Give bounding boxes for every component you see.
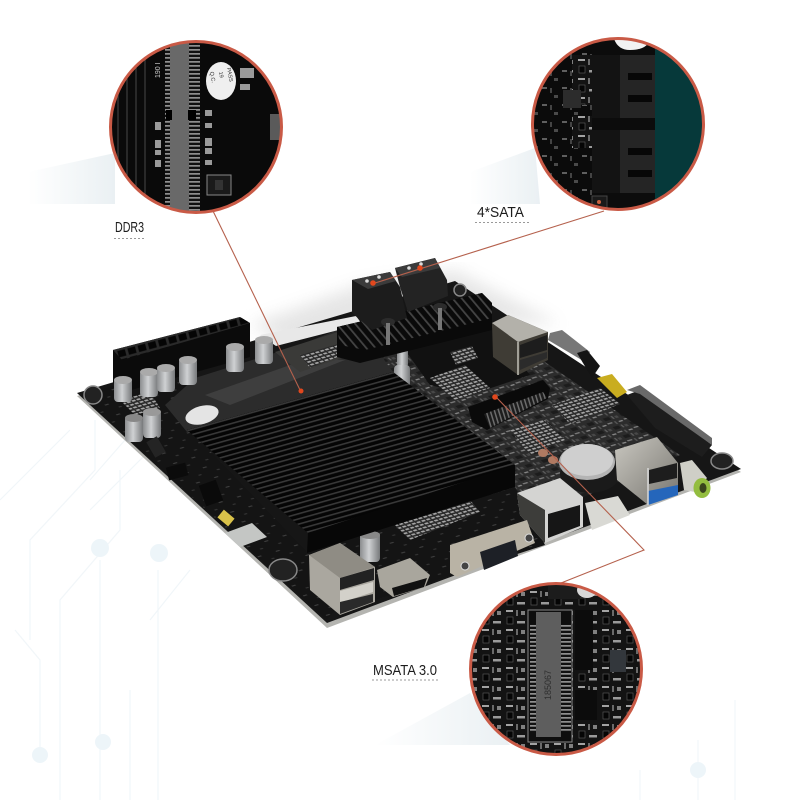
pin headers — [548, 330, 712, 457]
ATX power connector — [113, 317, 250, 392]
board PCB surface — [77, 281, 741, 623]
callout circle: SATA close-up — [530, 35, 710, 215]
mSATA slot — [468, 380, 550, 430]
white QC sticker — [183, 402, 221, 428]
soft shadow behind board — [250, 270, 560, 350]
sticker label: 19 — [217, 71, 224, 78]
capacitors — [114, 336, 424, 562]
LAN port — [517, 478, 583, 543]
label: DDR3: DDR3 — [115, 220, 144, 236]
black inductor, chip and yellow header — [146, 436, 235, 526]
USB 3.0 stack — [615, 437, 678, 505]
motherboard — [77, 258, 741, 628]
VGA port — [450, 520, 535, 577]
yellow jumper header — [597, 374, 627, 398]
leader end dots — [298, 265, 498, 400]
green audio jack — [680, 460, 710, 498]
callout circle: mSATA close-up — [468, 580, 646, 758]
screw holes — [84, 284, 733, 581]
label: 4*SATA: 4*SATA — [477, 204, 524, 221]
slot marking: 185067 — [543, 670, 553, 700]
silkscreen marking: 190 I — [155, 62, 162, 78]
screws on chipset heatsink — [381, 303, 447, 345]
silver back strip — [260, 316, 362, 346]
leader lines — [213, 211, 644, 583]
label: DDR3 — [114, 220, 145, 238]
board edge — [77, 284, 741, 628]
SATA connectors — [352, 258, 448, 330]
coin battery — [559, 444, 620, 493]
SMD component clusters — [120, 342, 620, 540]
front USB stack — [309, 543, 375, 615]
sticker label — [210, 68, 233, 83]
background decoration: faint circuit traces and wedges — [0, 148, 735, 800]
sticker label: Q.C. — [208, 71, 216, 84]
callout circle: DDR3 close-up — [108, 40, 284, 216]
PCB component texture — [380, 300, 680, 520]
rear USB stack — [492, 315, 548, 375]
copper pads — [538, 449, 558, 464]
CPU heatsink with fins — [187, 372, 515, 553]
label: MSATA 3.0: MSATA 3.0 — [373, 662, 437, 679]
sticker label: PASS — [225, 67, 233, 83]
small chipset heatsink — [337, 293, 492, 363]
HDMI port — [377, 558, 430, 597]
